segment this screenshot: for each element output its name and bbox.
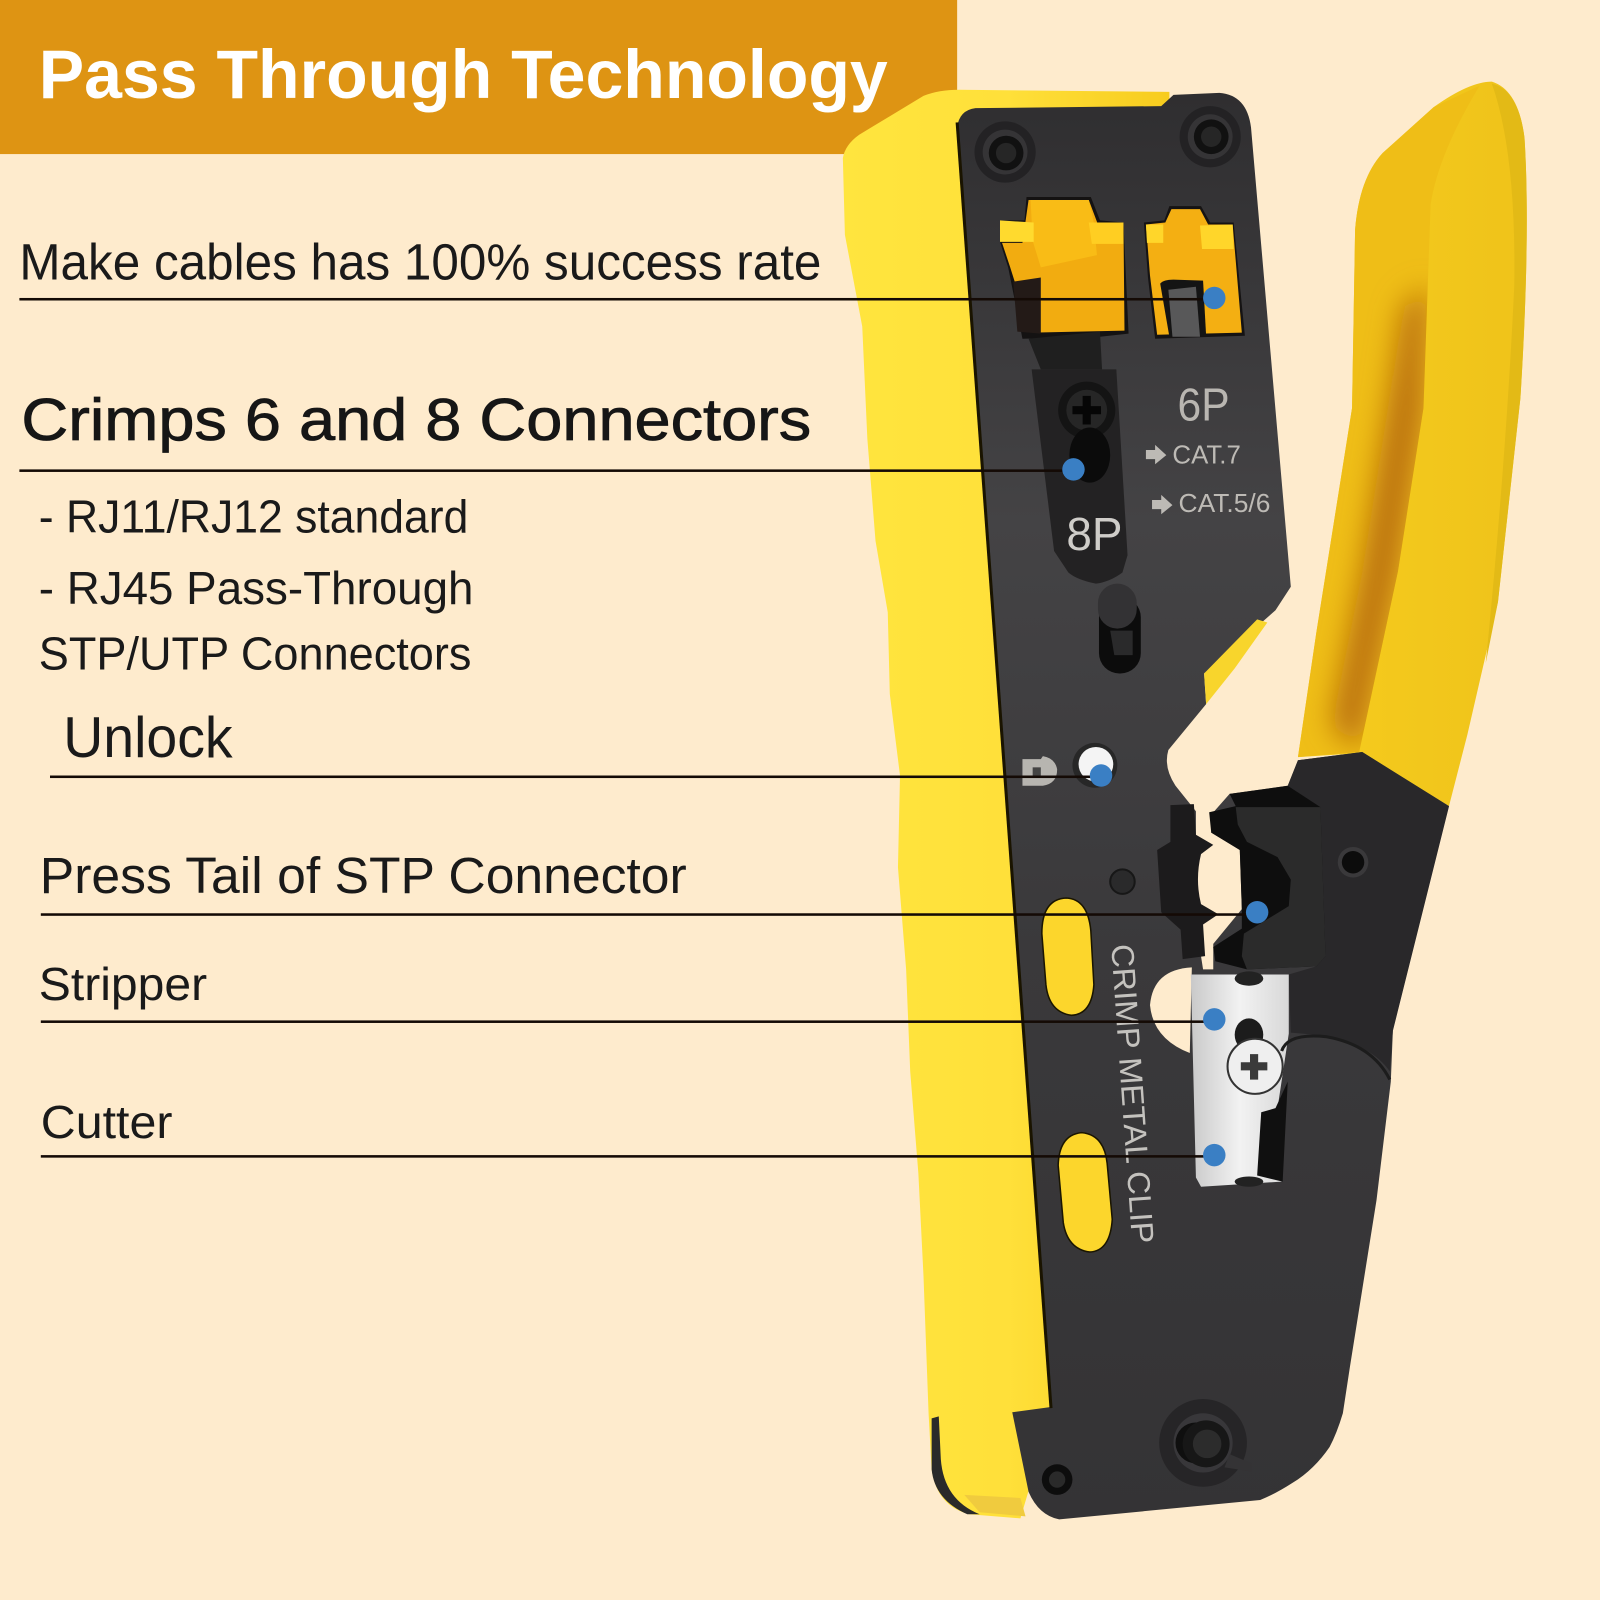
8P label: 8P — [1066, 508, 1122, 560]
unlock button — [1072, 743, 1117, 788]
callout: unlock: Unlock — [63, 706, 233, 770]
top left screw — [974, 121, 1036, 183]
callout: press tail — [40, 847, 1268, 923]
callout: cutter — [41, 1096, 1226, 1166]
grip end opening — [964, 1495, 1026, 1516]
callout: unlock — [50, 706, 1112, 787]
6P crimp socket — [1144, 206, 1245, 339]
CRIMP METAL CLIP label: CRIMP METAL CLIP — [1104, 943, 1161, 1245]
handle cover edge — [1282, 1036, 1390, 1080]
grip end shadow — [932, 1416, 980, 1514]
jaw gap — [1196, 808, 1242, 969]
callout: stripper — [39, 958, 1226, 1031]
title: Pass Through Technology — [39, 37, 888, 113]
callout: success rate — [19, 234, 1226, 309]
slider pin — [1098, 584, 1141, 673]
upper handle dark section — [1288, 752, 1449, 1071]
connector list: - RJ11/RJ12 standard — [39, 491, 468, 543]
title banner — [0, 0, 957, 154]
callout: crimps connectors: Crimps 6 and 8 Connectors — [21, 386, 811, 453]
6P label: 6P — [1178, 378, 1230, 430]
8P crimp socket — [1000, 197, 1129, 339]
callout: crimps connectors — [19, 386, 1085, 481]
connector list: - RJ45 Pass-Through — [39, 562, 473, 614]
plate left edge — [957, 122, 1051, 1408]
main black tool body — [957, 93, 1449, 1519]
callout: stripper: Stripper — [39, 958, 207, 1010]
CAT.7 label: CAT.7 — [1172, 441, 1241, 469]
yellow wedge insert — [1204, 619, 1267, 704]
upper yellow slot — [1042, 898, 1094, 1015]
lower yellow slot — [1058, 1133, 1112, 1252]
callout: success rate: Make cables has 100% success rate — [19, 234, 821, 291]
callout: press tail: Press Tail of STP Connector — [40, 847, 687, 904]
connector list — [39, 491, 473, 679]
bottom small screw — [1042, 1464, 1072, 1495]
bottom rivet — [1159, 1399, 1251, 1487]
callout: cutter: Cutter — [41, 1096, 172, 1148]
connector list: STP/UTP Connectors — [39, 627, 471, 679]
small hole — [1110, 869, 1135, 894]
cutter blade — [1191, 971, 1289, 1187]
8P latch — [1029, 332, 1128, 584]
top right screw — [1180, 106, 1241, 167]
crimping tool illustration — [843, 71, 1527, 1519]
left yellow grip body — [843, 90, 1169, 1518]
handle rivet hole — [1338, 847, 1368, 878]
right crimp die — [1209, 786, 1326, 969]
right yellow handle grip — [1286, 71, 1527, 806]
lock icon — [1022, 756, 1057, 786]
CAT.5/6 label: CAT.5/6 — [1179, 490, 1270, 518]
left crimp jaw — [1157, 804, 1218, 959]
stripper hole — [1150, 967, 1192, 1053]
